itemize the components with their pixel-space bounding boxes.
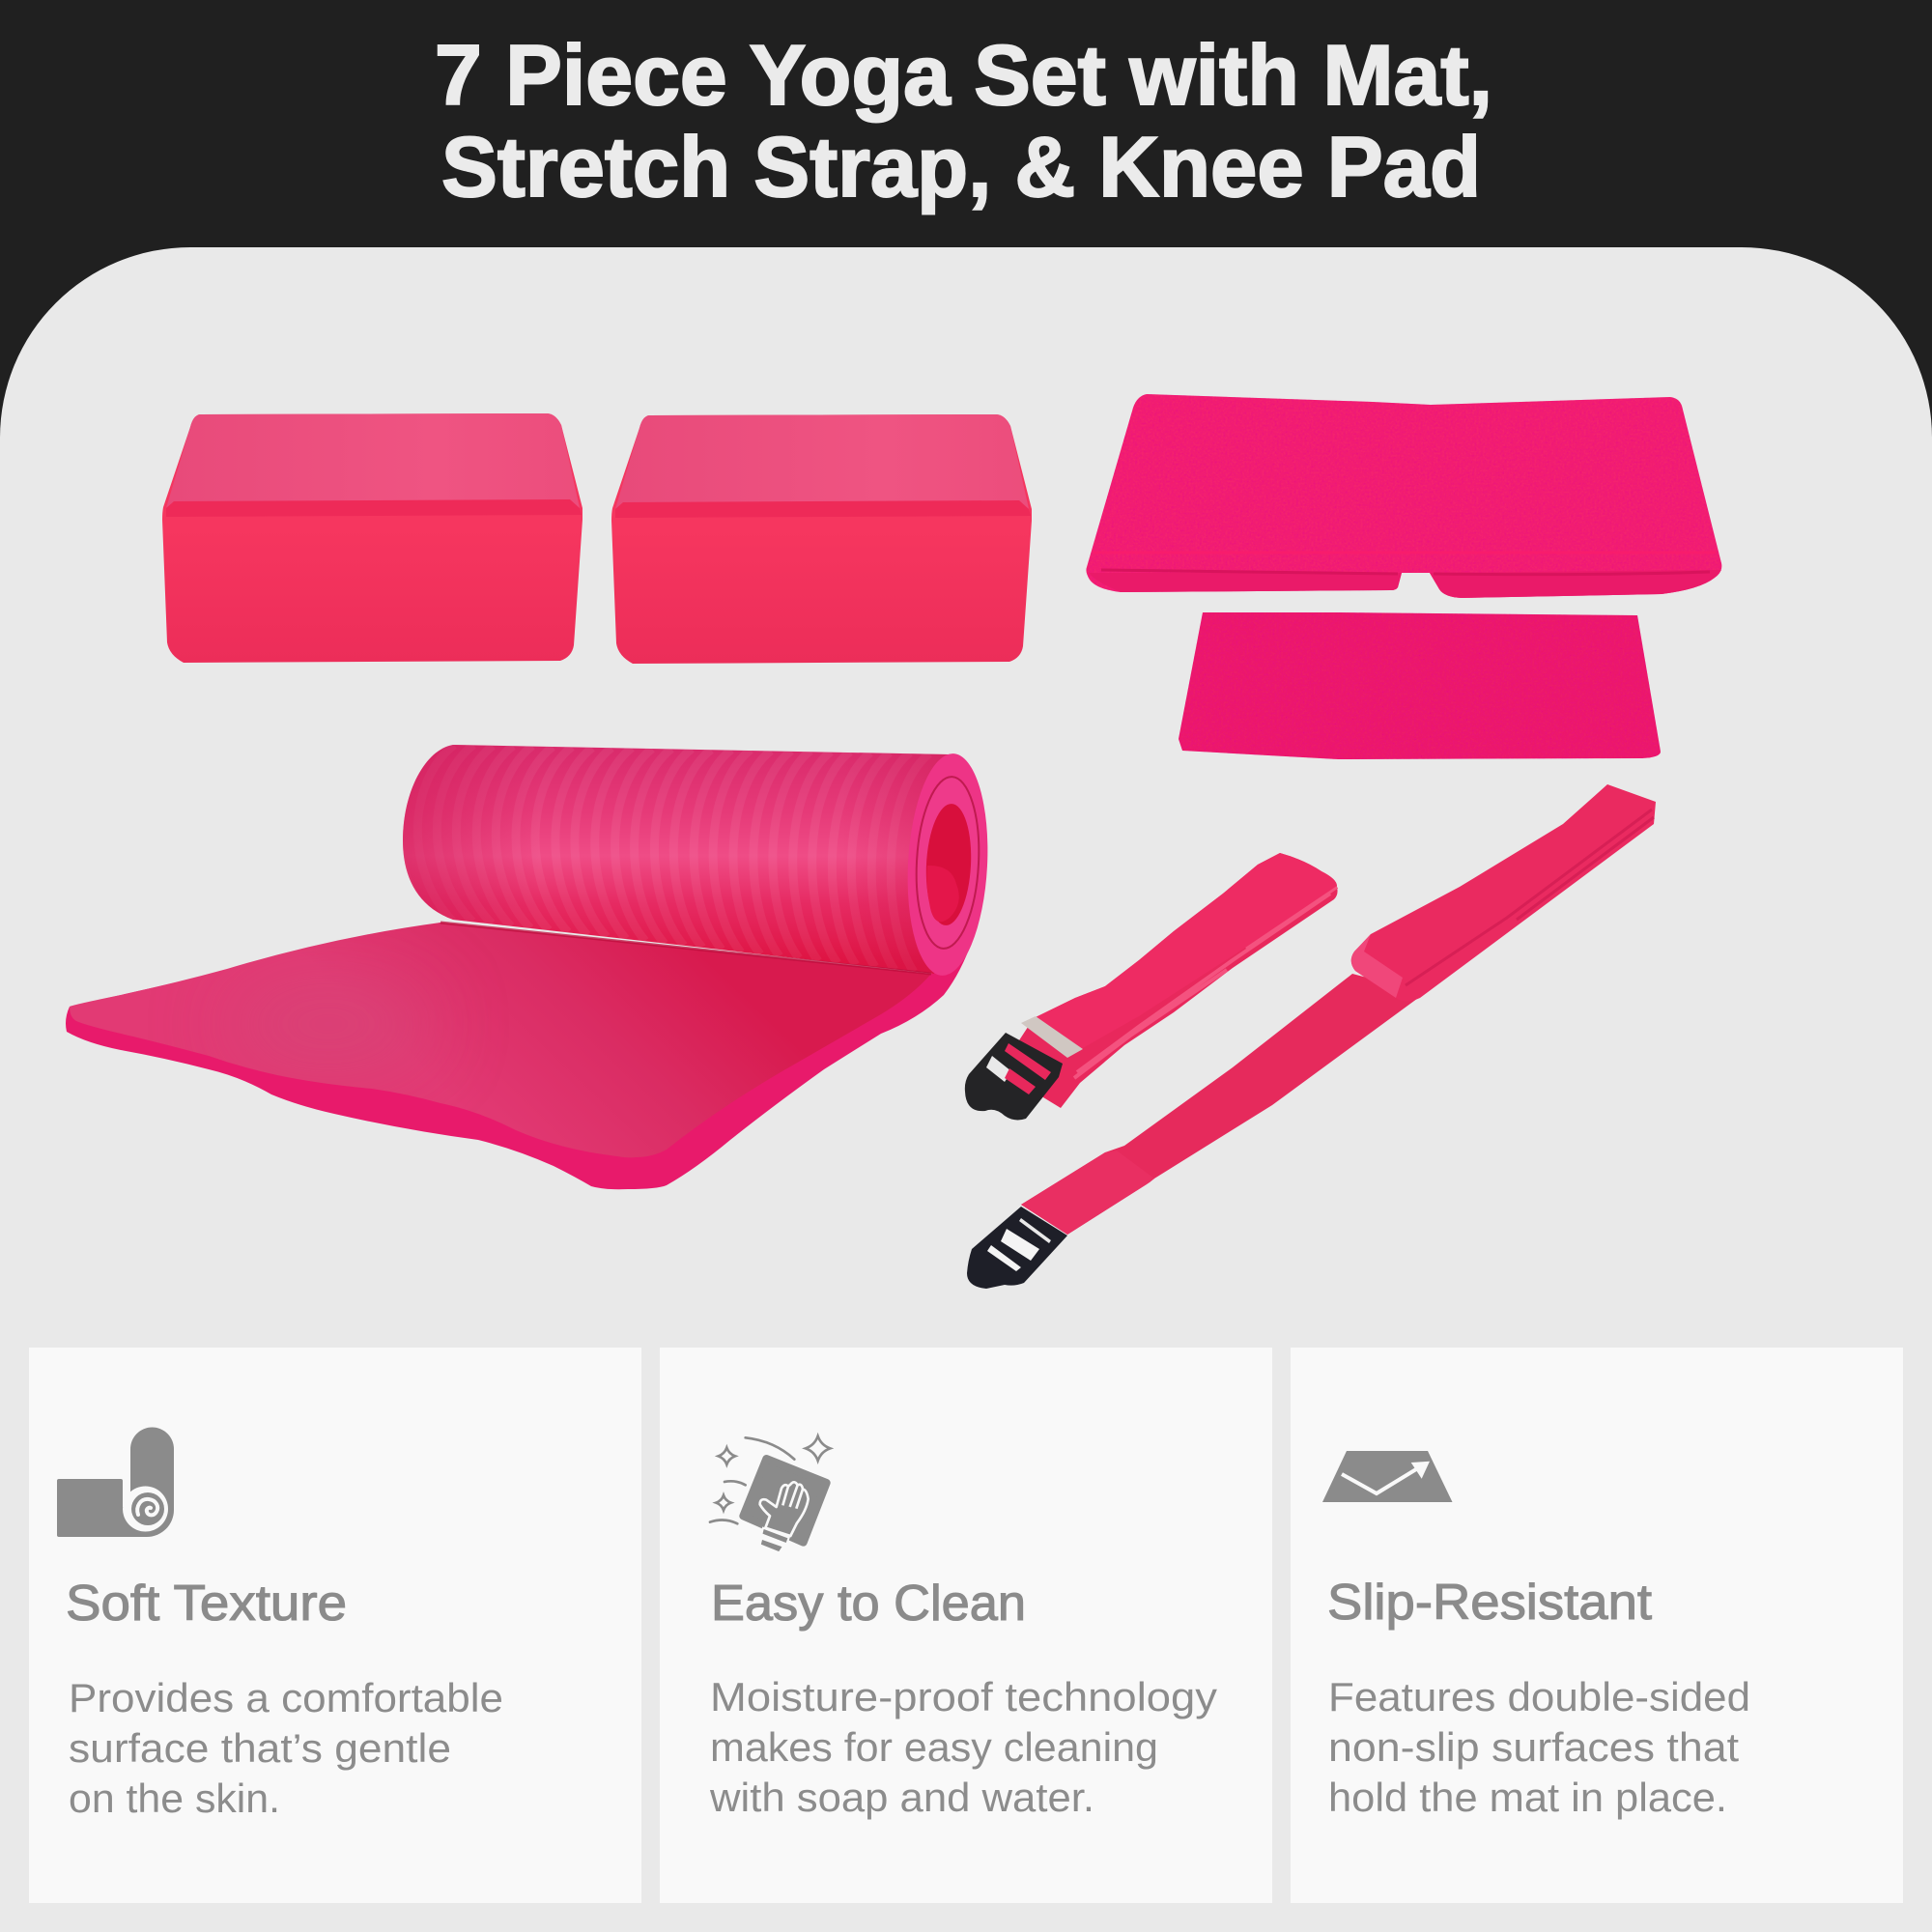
narrow strap section <box>1021 974 1425 1235</box>
body text: on the skin. <box>69 1776 280 1821</box>
plastic buckle <box>967 1207 1067 1289</box>
long strap with buckle <box>967 784 1656 1289</box>
folded strap bundle <box>1351 784 1656 1001</box>
feature card: easy to clean <box>660 1348 1272 1903</box>
body text: with soap and water. <box>709 1775 1094 1820</box>
strap folded layers <box>1005 853 1338 1108</box>
roll end spiral <box>902 752 993 978</box>
plastic buckle <box>965 1033 1063 1120</box>
heading: Soft Texture <box>66 1576 347 1632</box>
roll bottom contact shadow <box>440 923 931 974</box>
body text <box>1328 1674 1750 1820</box>
title <box>435 27 1492 214</box>
feature card: slip-resistant <box>1291 1348 1903 1903</box>
body text: Moisture-proof technology <box>710 1674 1217 1719</box>
yoga block left <box>162 413 582 663</box>
icon: rolled mat <box>57 1428 174 1537</box>
small folded towel <box>1179 612 1661 759</box>
metal keeper bar <box>1021 1016 1083 1058</box>
body text <box>709 1674 1217 1820</box>
mat top surface <box>70 923 931 1157</box>
body text: Provides a comfortable <box>69 1675 503 1720</box>
feature card: soft texture <box>29 1348 641 1903</box>
body text: hold the mat in place. <box>1328 1775 1727 1820</box>
roll ribs <box>398 745 952 974</box>
heading: Slip-Resistant <box>1327 1575 1653 1631</box>
body text: surface that’s gentle <box>69 1725 451 1771</box>
body text: makes for easy cleaning <box>710 1724 1158 1770</box>
large folded towel <box>1086 394 1721 598</box>
title: 7 Piece Yoga Set with Mat, <box>435 27 1492 123</box>
body text <box>69 1675 503 1821</box>
icon: hand wiping with cloth <box>710 1436 830 1552</box>
yoga block right <box>611 414 1032 664</box>
short strap with buckle <box>965 853 1338 1120</box>
heading: Easy to Clean <box>711 1576 1026 1632</box>
roll body <box>403 745 950 974</box>
body text: non-slip surfaces that <box>1328 1724 1739 1770</box>
body text: Features double-sided <box>1328 1674 1750 1719</box>
rolled yoga mat <box>66 745 993 1189</box>
icon: mat with arrow <box>1322 1451 1453 1502</box>
title: Stretch Strap, & Knee Pad <box>441 119 1481 214</box>
mat foam edge <box>66 923 978 1189</box>
